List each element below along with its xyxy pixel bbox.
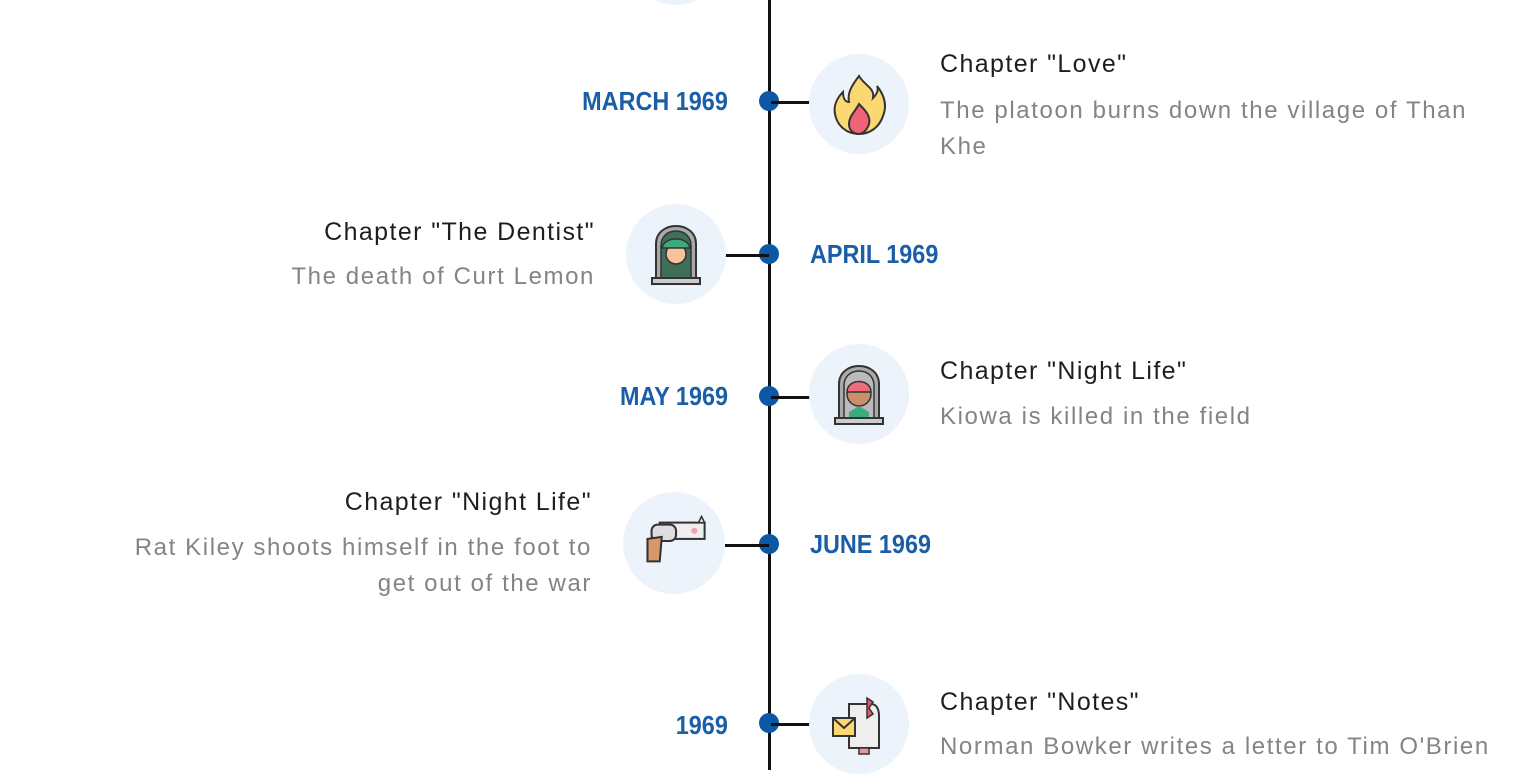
event: 1969 [676,674,1490,774]
date label: MARCH 1969 [582,86,728,116]
timeline dot [759,244,779,264]
timeline dot [759,713,779,733]
icon: fire [809,54,909,154]
date label: JUNE 1969 [810,529,931,559]
description: Khe [940,133,988,160]
description [940,97,1467,160]
description: Norman Bowker writes a letter to Tim O'Brien [940,733,1490,760]
icon: gravestone [809,344,909,444]
description: Kiowa is killed in the field [940,403,1252,430]
event: April 1969 [291,204,938,304]
title: Chapter "Night Life" [345,488,592,516]
date label: MAY 1969 [620,381,728,411]
title: Chapter "Love" [940,50,1127,78]
date label: APRIL 1969 [810,239,938,269]
title: Chapter "Notes" [940,688,1140,716]
top partial icon circle [626,0,726,5]
description: get out of the war [378,570,592,597]
event: June 1969 [135,488,931,597]
description: The platoon burns down the village of Than [940,97,1467,124]
event: May 1969 [620,344,1252,444]
timeline axis [768,0,771,770]
icon: soldier gravestone [626,204,726,304]
timeline dot [759,91,779,111]
icon: mailbox [809,674,909,774]
description: The death of Curt Lemon [291,263,595,290]
title: Chapter "The Dentist" [324,218,595,246]
icon: revolver [623,492,725,594]
description: Rat Kiley shoots himself in the foot to [135,534,592,561]
timeline dot [759,534,779,554]
date label: 1969 [676,710,728,740]
title: Chapter "Night Life" [940,357,1187,385]
description [135,534,592,597]
timeline dot [759,386,779,406]
event: March 1969 [582,50,1467,160]
